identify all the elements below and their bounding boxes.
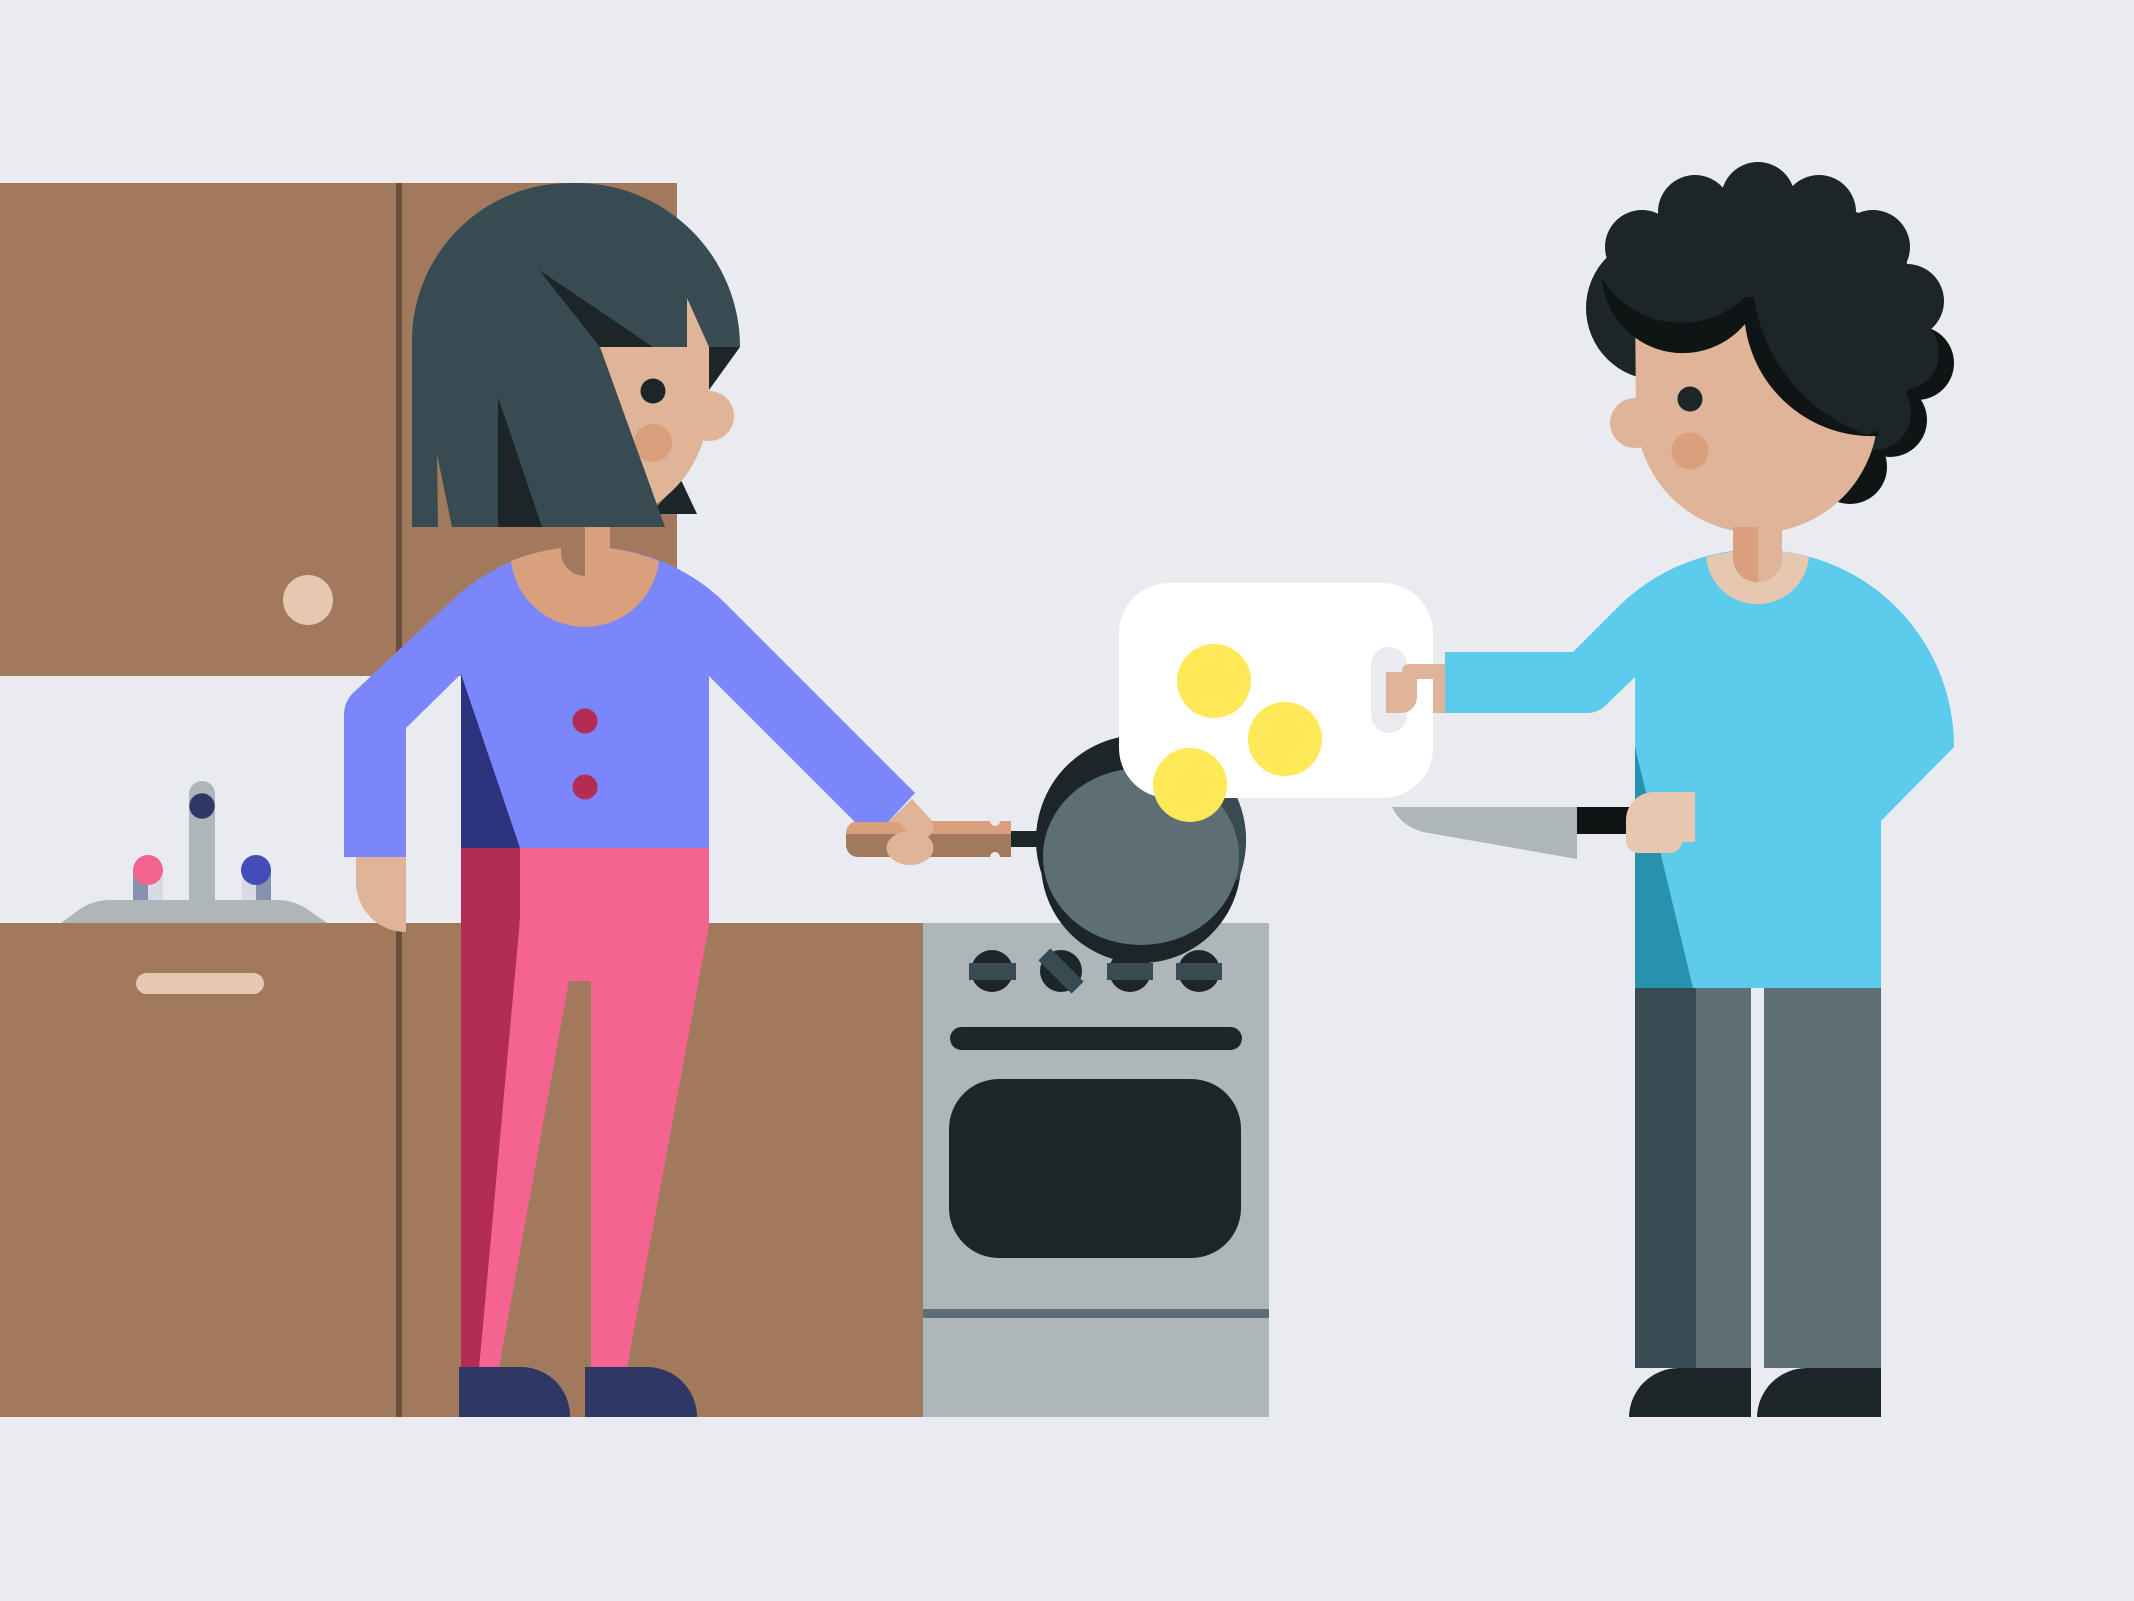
man: hair curls <box>1605 162 1944 450</box>
woman: cheek <box>634 424 672 462</box>
woman: shirt <box>344 547 915 857</box>
man: neck <box>1733 527 1782 582</box>
man: right shoe <box>1757 1368 1881 1417</box>
man: hand on knife <box>1626 792 1695 853</box>
woman: fringe shadow <box>539 270 653 347</box>
stove knobs <box>969 948 1222 994</box>
man: shirt <box>1445 550 1954 988</box>
woman: thumb <box>886 831 934 865</box>
woman: neck <box>585 520 610 552</box>
man: face <box>1635 300 1878 533</box>
woman: left hand <box>356 857 406 932</box>
man: neck shadow <box>1733 527 1758 582</box>
man: fringe <box>1602 180 1930 435</box>
cutting board <box>1119 583 1433 798</box>
woman: right shoe <box>585 1367 697 1417</box>
man: cheek <box>1672 432 1708 470</box>
woman: ear <box>684 391 734 441</box>
woman: hair <box>412 183 740 527</box>
woman: shirt shadow <box>461 674 520 848</box>
woman: lower button <box>572 774 598 800</box>
woman: trousers <box>479 848 709 1368</box>
lower cabinet <box>0 923 923 1417</box>
man: left shoe <box>1629 1368 1751 1417</box>
egg yolks <box>1153 644 1322 822</box>
woman: top button <box>572 708 598 734</box>
woman: wrist <box>888 799 933 837</box>
man: collar <box>1706 550 1809 604</box>
man <box>1386 162 1954 1417</box>
sink and faucet <box>61 781 327 923</box>
woman: hair shadow by forehead <box>709 347 740 390</box>
man: shirt shadow <box>1635 747 1693 988</box>
man: hair curls behind <box>1813 326 1954 504</box>
man: hand on board <box>1386 664 1445 713</box>
woman: eye <box>640 378 666 404</box>
woman: face <box>560 280 709 525</box>
man: trousers left leg light <box>1696 988 1751 1368</box>
woman: trouser shadow <box>461 848 520 1368</box>
woman: neck shadow <box>561 530 585 576</box>
stove <box>923 923 1269 1417</box>
woman: left shoe <box>459 1367 570 1417</box>
woman: hair shadow under chin <box>650 480 697 514</box>
woman <box>344 183 934 1417</box>
pan handle <box>846 816 1011 862</box>
man: ear <box>1610 398 1660 448</box>
man: fringe shadow <box>1602 250 1900 436</box>
man: eye <box>1678 386 1702 412</box>
woman: hair strand shadow <box>498 397 542 527</box>
man: trousers right leg <box>1764 988 1881 1368</box>
woman: collar <box>511 547 659 627</box>
frying pan <box>1011 735 1246 963</box>
man: trousers left leg <box>1635 988 1696 1368</box>
man: back hair <box>1586 236 1730 380</box>
upper cabinet <box>0 183 677 676</box>
knife <box>1392 807 1629 859</box>
